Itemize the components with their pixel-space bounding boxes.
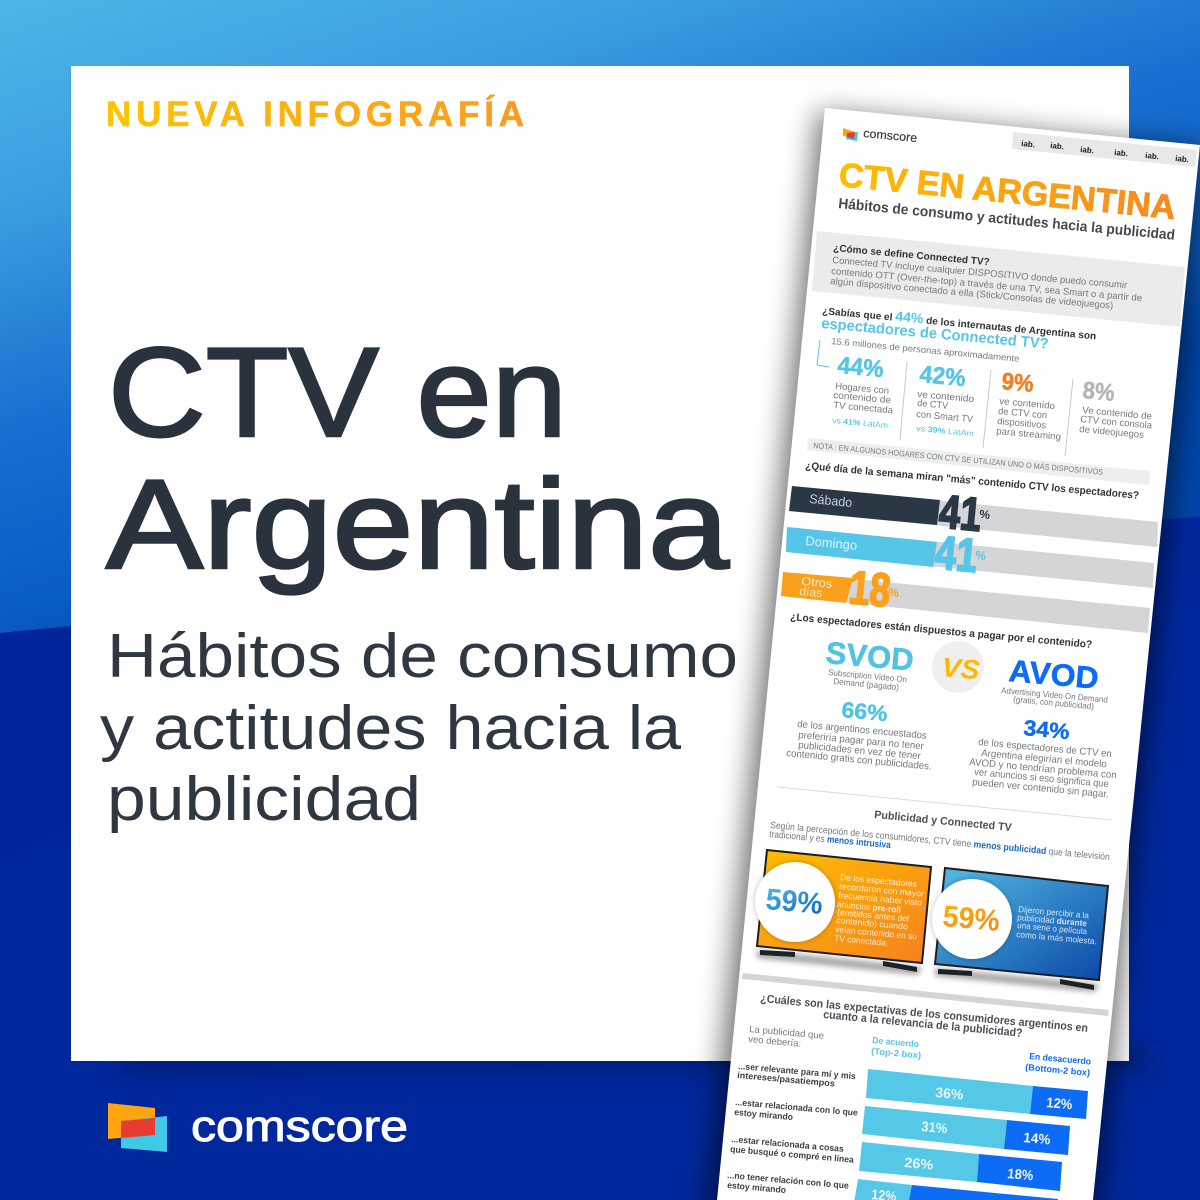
TV: orange: [755, 850, 931, 975]
SVOD column: 66%: [841, 697, 889, 726]
panel: tilted infographic sheet: [717, 108, 1200, 1200]
stat: 42% Smart TV: 42%: [918, 361, 967, 392]
SVOD column: Demand (pagado): [833, 676, 900, 692]
panel: white card: [71, 66, 1129, 1061]
stat: 8% consola: de videojuegos: [1079, 424, 1145, 441]
stat: 44% hogares: [832, 352, 894, 430]
row 1: [737, 1061, 1088, 1119]
question: expectativas: cuanto a la relevancia de la publicidad?: [823, 1009, 1023, 1040]
stat: 8% consola: CTV con consola: [1080, 414, 1153, 432]
VS badge: VS: [940, 652, 981, 685]
AVOD column: AVOD y no tendrían problema con: [969, 757, 1117, 781]
section: Publicidad y Connected TV: Publicidad y Connected TV: [874, 809, 1013, 834]
partner logos bar: iab.: [1050, 141, 1064, 151]
bar: Otros días: Otros: [801, 574, 833, 591]
bar: Sábado: [789, 484, 1158, 547]
TV: orange: veían contenido en su: [835, 924, 918, 941]
stat: 44% hogares: vs 41% LatAm: [832, 416, 889, 430]
row 3: 18%: [1007, 1165, 1035, 1183]
TV: orange: 59%: [764, 883, 824, 921]
definition box: ¿Cómo se define Connected TV?: [833, 243, 990, 268]
kicker: nueva infografía: NUEVA INFOGRAFÍA: [106, 94, 524, 134]
bar: Otros días: 18: [847, 560, 893, 617]
definition box: contenido OTT (Over-the-top) a través de una TV, sea Smart o a partir de: [831, 266, 1143, 304]
AVOD column: Advertising Video On Demand: [1001, 685, 1109, 705]
SVOD column: contenido gratis con publicidades.: [786, 748, 932, 773]
bar: Otros días: días: [799, 584, 823, 600]
TV: blue: Dijeron percibir a la: [1018, 904, 1090, 920]
sheet title: CTV EN ARGENTINA: [837, 156, 1177, 227]
stat: 9% streaming: [996, 368, 1061, 443]
definition box: [812, 231, 1185, 327]
legend and row intro: La publicidad que: [749, 1024, 824, 1042]
question: día de la semana: ¿Qué día de la semana miran "más" contenido CTV los espectadores?: [805, 460, 1139, 502]
TV: blue: publicidad durante: [1017, 912, 1088, 928]
stat: 9% streaming: 9%: [1000, 368, 1035, 398]
TV: blue: como la más molesta.: [1016, 929, 1097, 946]
note bar: NOTA : EN ALGUNOS HOGARES CON CTV SE UTILIZAN UNO O MÁS DISPOSITIVOS: [813, 441, 1103, 477]
legend and row intro: (Top-2 box): [871, 1046, 922, 1061]
stat: 8% consola: 8%: [1081, 377, 1116, 407]
bar: Sábado: Sábado: [809, 491, 853, 510]
legend and row intro: De acuerdo: [872, 1035, 920, 1049]
row 4: estoy mirando: [727, 1180, 787, 1195]
definition box: Connected TV incluye cualquier DISPOSITIVO donde puedo consumir: [832, 255, 1128, 291]
AVOD column: de los espectadores de CTV en: [978, 737, 1112, 760]
VS badge: [932, 641, 984, 693]
subheading: Hábitos de consumo: [107, 622, 738, 691]
row 3: ...estar relacionada a cosas: [731, 1134, 844, 1154]
SVOD column: de los argentinos encuestados: [797, 719, 927, 742]
stat: 9% streaming: dispositivos: [997, 416, 1047, 431]
partner logos bar: iab.: [1080, 145, 1094, 155]
stat: 42% Smart TV: de CTV: [917, 398, 949, 412]
legend and row intro: En desacuerdo: [1029, 1051, 1092, 1067]
sheet logo: comscore: [863, 126, 918, 145]
row 3: que busqué o compré en línea: [730, 1144, 855, 1165]
AVOD column: [969, 653, 1117, 800]
stat: 8% consola: Ve contenido de: [1082, 405, 1152, 422]
bar: Otros días: %: [888, 585, 900, 600]
heading: CTV en Argentina: [106, 321, 729, 595]
AVOD column: ver anuncios si eso significa que: [974, 767, 1110, 790]
bar: Domingo: %: [975, 548, 987, 563]
question: 44% internautas: 15.6 millones de personas aproximadamente: [831, 336, 1020, 364]
bar: Domingo: 41: [933, 525, 980, 582]
stat: 42% Smart TV: [916, 361, 975, 438]
stat: 44% hogares: contenido de: [833, 390, 891, 406]
arrow: [817, 340, 829, 367]
TV: blue: [932, 868, 1108, 992]
legend and row intro: veo debería:: [748, 1034, 802, 1050]
AVOD column: 34%: [1023, 715, 1071, 744]
partner logos bar: iab.: [1145, 151, 1159, 161]
question: 44% internautas: ¿Sabías que el 44% de los internautas de Argentina son: [822, 301, 1097, 342]
row 1: intereses/pasatiempos: [737, 1070, 835, 1089]
row 2: 14%: [1023, 1129, 1052, 1147]
SVOD column: [786, 635, 932, 773]
stat: 44% hogares: 44%: [836, 352, 885, 383]
AVOD column: AVOD: [1007, 653, 1100, 696]
legend and row intro: (Bottom-2 box): [1025, 1062, 1090, 1078]
row 2: 31%: [921, 1118, 949, 1136]
partner logos bar: iab.: [1175, 154, 1189, 164]
logo: comscore: comscore: [191, 1102, 408, 1151]
SVOD column: preferiría pagar para no tener: [798, 730, 925, 752]
TV: orange: contenido) cuando: [836, 915, 909, 932]
subheading: publicidad: [107, 765, 421, 834]
row 2: ...estar relacionada con lo que: [735, 1097, 858, 1118]
TV: orange: recordaron con mayor: [839, 881, 925, 899]
row 2: estoy mirando: [734, 1107, 794, 1122]
legend and row intro: [748, 1024, 1092, 1078]
stat: 9% streaming: para streaming: [996, 426, 1061, 443]
question: 44% internautas: espectadores de Connected TV?: [821, 315, 1049, 353]
TV: orange: frecuencia haber visto: [838, 890, 923, 908]
SVOD column: SVOD: [824, 635, 915, 678]
sheet logo: [843, 126, 918, 145]
TV: blue: una serie o película: [1017, 920, 1088, 936]
section: Publicidad y Connected TV: Según la percepción de los consumidores, CTV tiene menos publicidad que la televisión: [770, 820, 1110, 863]
definition box: algún dispositivo conectado a ella (Stick/Consolas de videojuegos): [830, 276, 1114, 312]
partner logos bar: [1012, 132, 1197, 167]
stat: 9% streaming: ve contenido: [999, 396, 1055, 412]
partner logos bar: iab.: [1114, 148, 1128, 158]
logo: comscore: [108, 1102, 408, 1152]
question: expectativas: ¿Cuáles son las expectativas de los consumidores argentinos en: [760, 993, 1088, 1035]
bar: Sábado: %: [979, 507, 991, 522]
stat: 42% Smart TV: vs 39% LatAm: [916, 424, 975, 438]
heading: CTV en Argentina: Argentina: [106, 453, 729, 595]
TV: orange: De los espectadores: [840, 872, 917, 889]
stat: 44% hogares: TV conectada: [833, 400, 894, 416]
row 2: [734, 1097, 1070, 1155]
TV: orange: anuncios pre-roll: [837, 899, 901, 915]
row 1: 36%: [935, 1084, 965, 1103]
AVOD column: (gratis, con publicidad): [1013, 694, 1095, 711]
heading: CTV en Argentina: CTV en: [108, 321, 567, 463]
row 1: ...ser relevante para mí y mis: [738, 1061, 856, 1081]
row 3: [730, 1134, 1062, 1191]
bar: Domingo: [786, 525, 1154, 588]
stat: 42% Smart TV: ve contenido: [917, 389, 974, 405]
stat: 8% consola: [1079, 377, 1153, 441]
TV: orange: TV conectada.: [834, 933, 889, 948]
AVOD column: pueden ver contenido sin pagar.: [972, 777, 1109, 800]
row 4: [727, 1170, 1058, 1200]
partner logos bar: iab.: [1021, 139, 1035, 149]
stat: 42% Smart TV: con Smart TV: [916, 409, 974, 425]
bar: Otros días: [781, 560, 1150, 633]
bar: Sábado: 41: [937, 484, 984, 541]
TV: orange: (emitidos antes del: [837, 907, 910, 924]
sheet subtitle: Hábitos de consumo y actitudes hacia la publicidad: [838, 196, 1176, 244]
bar: Domingo: Domingo: [805, 533, 858, 553]
row 3: 26%: [904, 1154, 935, 1173]
subheading: [100, 622, 738, 834]
stat: 9% streaming: de CTV con: [998, 406, 1048, 421]
question: 44% internautas: [821, 301, 1097, 364]
subheading: y actitudes hacia la: [100, 694, 682, 763]
row 1: 12%: [1046, 1094, 1074, 1112]
section: Publicidad y Connected TV: tradicional y es menos intrusiva: [769, 829, 892, 851]
question: pagar por contenido: ¿Los espectadores están dispuestos a pagar por el contenido?: [790, 611, 1093, 651]
row 4: ...no tener relación con lo que: [727, 1170, 849, 1191]
stat: 44% hogares: Hogares con: [835, 381, 890, 397]
SVOD column: Subscription Video On: [828, 667, 908, 684]
TV: blue: 59%: [941, 900, 1001, 938]
AVOD column: Argentina elegirían el modelo: [981, 748, 1108, 770]
SVOD column: publicidades en vez de tener: [798, 740, 922, 762]
